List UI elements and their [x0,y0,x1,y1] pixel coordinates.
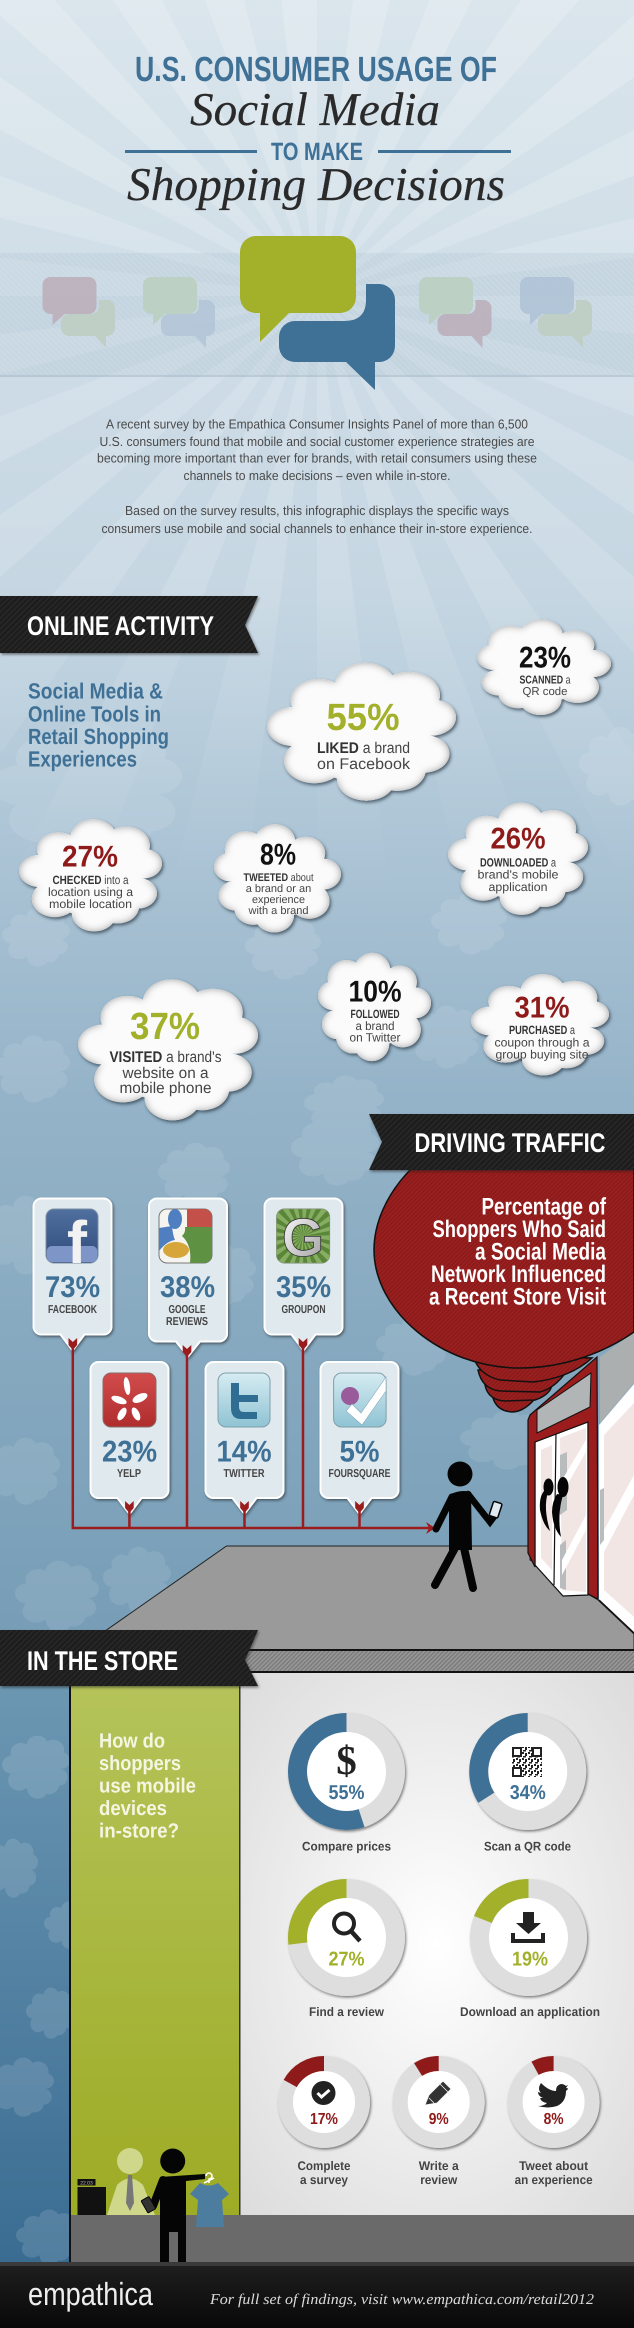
donut: scan a QR code 34%: Scan a QR code [484,1840,571,1854]
card: facebook 73%: 73% [45,1271,100,1304]
card: google reviews 38%: 38% [160,1271,215,1304]
icon: magnifier [334,1914,360,1941]
cloud: 31% purchased: 31% [514,992,570,1024]
donut: compare prices 55% [298,1722,396,1854]
card: yelp 23% [90,1362,168,1514]
icon: foursquare [334,1373,386,1427]
card: foursquare 5%: FOURSQUARE [328,1468,391,1480]
donut: download an application 19%: Download an application [460,2005,600,2019]
ribbon: online activity: ONLINE ACTIVITY [27,611,214,641]
title: U.S. CONSUMER USAGE OF [135,50,497,89]
cloud: 31% purchased: PURCHASED a [509,1023,575,1037]
footer [0,2262,634,2328]
donut: compare prices 55%: $ [336,1737,357,1783]
card: foursquare 5% [320,1362,398,1514]
donut: write a review 9%: 9% [429,2111,449,2128]
card: groupon 35%: 35% [276,1271,331,1304]
subheading: social media and online tools: Experiences [28,746,137,772]
cashier and register [78,2148,155,2215]
intro text [97,416,537,536]
speech bubble band [0,253,634,377]
cloud: 8% tweeted: experience [252,894,305,906]
icon: twitter [218,1373,270,1427]
intro text: consumers use mobile and social channels to enhance their in-store experience. [102,521,532,536]
cloud: 27% checked: 27% [62,840,118,874]
card: foursquare 5%: 5% [340,1436,380,1468]
card: google reviews 38% [149,1198,227,1356]
hatched strip [240,1649,634,1673]
donut: download an application 19%: 19% [512,1948,548,1970]
person walking with phone [435,1462,502,1588]
intro text: becoming more important than ever for brands, with retail consumers using these [97,450,537,466]
title [125,50,511,211]
icon: bird [538,2083,568,2108]
cloud: 27% checked: location using a [48,885,133,899]
subheading: social media and online tools: Retail Shopping [28,724,169,749]
donut: write a review 9% [400,2064,477,2187]
cloud: 8% tweeted: TWEETED about [244,872,314,884]
logo: empathica: empathica [28,2276,153,2312]
donut: tweet about an experience 8%: an experience [515,2173,593,2187]
cloud: 31% purchased: coupon through a [494,1036,590,1050]
ribbon: in the store: IN THE STORE [27,1646,178,1676]
donut: compare prices 55%: 55% [328,1782,365,1804]
donut: complete a survey 17%: a survey [300,2173,348,2187]
donut: complete a survey 17% [286,2064,362,2187]
intro text: U.S. consumers found that mobile and social customer experience strategies are [100,434,534,449]
donut: write a review 9%: review [420,2173,457,2187]
cloud: 26% downloaded [448,803,588,915]
donut: complete a survey 17%: 17% [310,2111,338,2128]
card: facebook 73%: FACEBOOK [48,1304,98,1316]
sunburst rays [0,0,634,946]
question heading [99,1730,196,1842]
question heading: How do [99,1730,165,1752]
donut: find a review 27% [298,1888,396,2019]
donut: tweet about an experience 8%: Tweet about [519,2159,589,2173]
cloud: 23% scanned: SCANNED a [520,674,571,686]
cloud: 10% followed: 10% [348,976,402,1008]
cloud: 55% liked: on Facebook [317,756,410,773]
donut: complete a survey 17%: Complete [298,2159,351,2173]
title: TO MAKE [271,138,363,166]
cloud: 31% purchased: group buying site [496,1048,589,1062]
card: twitter 14%: 14% [216,1436,272,1468]
shopper holding shirt [141,2148,229,2262]
card: groupon 35% [264,1198,342,1350]
cloud: 27% checked [19,819,162,931]
icon: green speech bubble [240,236,356,342]
cloud: 37% visited: 37% [130,1006,200,1048]
donut: tweet about an experience 8%: 8% [544,2111,564,2128]
card: facebook 73% [34,1198,112,1350]
cloud: 55% liked: 55% [326,697,400,739]
icon: blue speech bubble [279,284,395,390]
question heading: devices [99,1797,167,1820]
cloud: 26% downloaded: brand's mobile [478,868,559,882]
cloud: 8% tweeted: with a brand [247,905,308,917]
cloud: 37% visited: VISITED a brand's [110,1049,222,1066]
cloud: 27% checked: mobile location [49,897,132,911]
icon: yelp [103,1373,156,1427]
cloud: 26% downloaded: DOWNLOADED a [480,856,556,870]
card: twitter 14%: TWITTER [224,1468,265,1480]
card: yelp 23%: YELP [117,1468,141,1480]
donut: find a review 27%: Find a review [309,2005,384,2019]
icon: download [511,1912,545,1943]
subheading: social media and online tools: Online Tools in [28,702,161,726]
icon: google [159,1209,212,1263]
title: Social Media [190,84,440,136]
card: google reviews 38%: REVIEWS [166,1316,208,1328]
cloud: 10% followed: FOLLOWED [350,1007,400,1021]
cloud: 31% purchased [471,974,609,1075]
cloud: 27% checked: CHECKED into a [52,873,129,887]
donut: write a review 9%: Write a [419,2159,460,2173]
sidewalk [78,1546,634,1650]
background clouds [0,721,634,1632]
question heading: shoppers [99,1752,181,1775]
title: Shopping Decisions [127,159,505,211]
card: yelp 23%: 23% [102,1436,157,1468]
floor [71,2215,634,2262]
card: groupon 35%: GROUPON [282,1304,326,1316]
icon: pencil [425,2081,451,2105]
white panel [239,1673,634,2215]
cashier and register: 22.03 [80,2180,93,2186]
cloud: 10% followed [318,953,431,1061]
icon: check circle [312,2081,336,2105]
ribbon: driving traffic [369,1114,634,1170]
icon: QR code [512,1747,542,1777]
icon: groupon: G [282,1208,324,1268]
intro text: A recent survey by the Empathica Consumer Insights Panel of more than 6,500 [106,416,528,432]
donut: compare prices 55%: Compare prices [302,1840,391,1854]
question heading: in-store? [99,1820,179,1842]
cloud: 8% tweeted [214,824,341,932]
store interior: blue panel [0,1686,71,2262]
card: twitter 14% [206,1362,284,1514]
ribbon: online activity [0,596,258,653]
donut: scan a QR code 34% [479,1722,577,1854]
intro text: channels to make decisions – even while in-store. [184,468,450,483]
cloud: 37% visited: mobile phone [120,1080,212,1097]
donut: find a review 27%: 27% [328,1948,365,1970]
cloud: 23% scanned [477,619,611,715]
sky background [0,0,634,1660]
subheading: social media and online tools [28,678,169,772]
cloud: 55% liked [267,663,456,801]
cloud: 23% scanned: QR code [522,686,568,698]
question heading: use mobile [99,1774,196,1798]
cloud: 23% scanned: 23% [519,642,571,674]
green panel [71,1672,239,2215]
donut: download an application 19% [460,1888,600,2019]
intro text: Based on the survey results, this infographic displays the specific ways [125,503,509,518]
subheading: social media and online tools: Social Media & [28,678,163,704]
cloud: 10% followed: a brand [356,1019,394,1033]
footer link: For full set of findings, visit www.empathica.com/retail2012 [209,2292,595,2308]
awning tiers [473,1355,592,1412]
cloud: 55% liked: LIKED a brand [317,740,410,757]
donut: scan a QR code 34%: 34% [510,1782,546,1804]
awning circle with heading [374,1168,634,1368]
cloud: 10% followed: on Twitter [350,1030,400,1044]
card: google reviews 38%: GOOGLE [168,1304,206,1316]
cloud: 26% downloaded: 26% [490,822,546,856]
cloud: 37% visited [78,979,258,1120]
cloud: 37% visited: website on a [122,1065,209,1082]
icon: facebook [46,1209,98,1276]
cloud: 8% tweeted: a brand or an [246,883,311,895]
cloud: 26% downloaded: application [488,880,548,894]
storefront [528,1332,634,1633]
ribbon: in the store [0,1630,258,1686]
connector arrows [68,1338,435,1534]
icon: facebook: f [67,1209,88,1276]
cloud: 8% tweeted: 8% [260,838,296,872]
donut: tweet about an experience 8% [515,2064,593,2187]
